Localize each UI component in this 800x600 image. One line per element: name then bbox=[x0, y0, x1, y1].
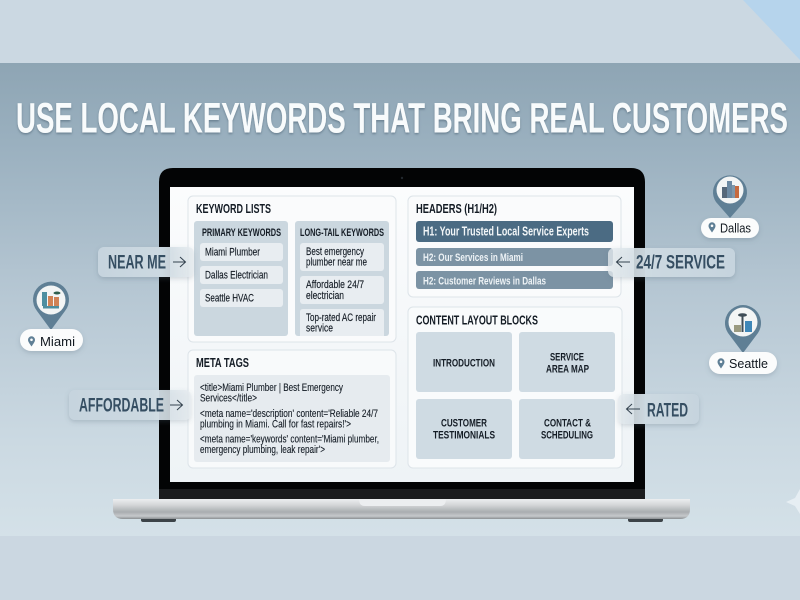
block: contact and scheduling bbox=[519, 399, 615, 459]
heading: keyword lists: KEYWORD LISTS bbox=[196, 201, 271, 216]
column: long-tail keywords: plumber near me bbox=[306, 256, 367, 268]
laptop lid and bezel bbox=[159, 168, 645, 499]
laptop base bbox=[113, 499, 690, 522]
callout: affordable bbox=[69, 390, 191, 420]
icon: seattle map pin bbox=[725, 305, 761, 353]
panel: keyword lists bbox=[188, 196, 396, 342]
column: long-tail keywords: Best emergency bbox=[306, 246, 364, 258]
callout: 24/7 service bbox=[608, 248, 735, 277]
callout: near me: NEAR ME bbox=[108, 252, 166, 274]
heading: headers: HEADERS (H1/H2) bbox=[416, 201, 497, 216]
column: primary keywords bbox=[194, 221, 288, 336]
h2 bar: services: H2: Our Services in Miami bbox=[423, 252, 523, 264]
block: service area map: SERVICE bbox=[550, 352, 584, 364]
h2 bar: services bbox=[416, 248, 613, 266]
block: customer testimonials: CUSTOMER bbox=[441, 418, 487, 430]
icon: dallas map pin bbox=[713, 175, 747, 218]
callout: rated: RATED bbox=[647, 400, 688, 422]
pin: seattle bbox=[709, 305, 777, 374]
panel: meta tags bbox=[188, 350, 396, 468]
column: long-tail keywords bbox=[295, 221, 389, 336]
code block: meta tag examples bbox=[194, 375, 390, 462]
label: seattle: Seattle bbox=[729, 356, 768, 371]
block: contact and scheduling: CONTACT & bbox=[544, 418, 591, 430]
column: primary keywords: Miami Plumber bbox=[205, 246, 260, 258]
column: long-tail keywords: Top-rated AC repair bbox=[306, 312, 376, 324]
block: contact and scheduling: SCHEDULING bbox=[541, 430, 593, 442]
panel: headers bbox=[408, 196, 621, 297]
heading: content layout blocks: CONTENT LAYOUT BLOCKS bbox=[416, 312, 538, 328]
code block: meta tag examples: <title>Miami Plumber | Best Emergency bbox=[200, 382, 343, 394]
pin: miami bbox=[20, 282, 83, 351]
block: service area map bbox=[519, 332, 615, 392]
block: customer testimonials bbox=[416, 399, 512, 459]
h2 bar: reviews: H2: Customer Reviews in Dallas bbox=[423, 276, 546, 288]
column: primary keywords: Dallas Electrician bbox=[205, 270, 268, 282]
heading: meta tags: META TAGS bbox=[196, 355, 249, 370]
pin: dallas bbox=[701, 175, 759, 238]
block: introduction: INTRODUCTION bbox=[433, 358, 495, 370]
icon: miami map pin bbox=[33, 282, 69, 330]
block: customer testimonials: TESTIMONIALS bbox=[433, 430, 495, 442]
label: miami: Miami bbox=[40, 334, 75, 349]
callout: near me bbox=[98, 247, 194, 277]
label: dallas: Dallas bbox=[720, 220, 751, 236]
column: long-tail keywords: service bbox=[306, 322, 333, 334]
callout: 24/7 service: 24/7 SERVICE bbox=[636, 252, 725, 274]
code block: meta tag examples: Services</title> bbox=[200, 392, 257, 404]
code block: meta tag examples: <meta name='keywords' content='Miami plumber, bbox=[200, 434, 379, 446]
code block: meta tag examples: emergency plumbing, leak repair'> bbox=[200, 444, 325, 456]
column: primary keywords: PRIMARY KEYWORDS bbox=[202, 227, 281, 239]
column: long-tail keywords: Affordable 24/7 bbox=[306, 279, 364, 291]
code block: meta tag examples: <meta name='description' content='Reliable 24/7 bbox=[200, 408, 378, 420]
block: introduction bbox=[416, 332, 512, 392]
h1 bar bbox=[416, 221, 613, 242]
code block: meta tag examples: plumbing in Miami. Call for fast repairs!'> bbox=[200, 418, 351, 430]
panel: content layout blocks bbox=[408, 307, 622, 468]
column: primary keywords: Seattle HVAC bbox=[205, 292, 254, 304]
column: long-tail keywords: electrician bbox=[306, 290, 344, 302]
h1 bar: H1: Your Trusted Local Service Experts bbox=[423, 224, 589, 238]
laptop bbox=[113, 168, 690, 522]
callout: affordable: AFFORDABLE bbox=[79, 394, 164, 416]
column: long-tail keywords: LONG-TAIL KEYWORDS bbox=[300, 227, 384, 239]
callout: rated bbox=[618, 394, 699, 424]
block: service area map: AREA MAP bbox=[546, 364, 589, 376]
laptop screen bbox=[170, 187, 634, 482]
h2 bar: reviews bbox=[416, 271, 613, 289]
